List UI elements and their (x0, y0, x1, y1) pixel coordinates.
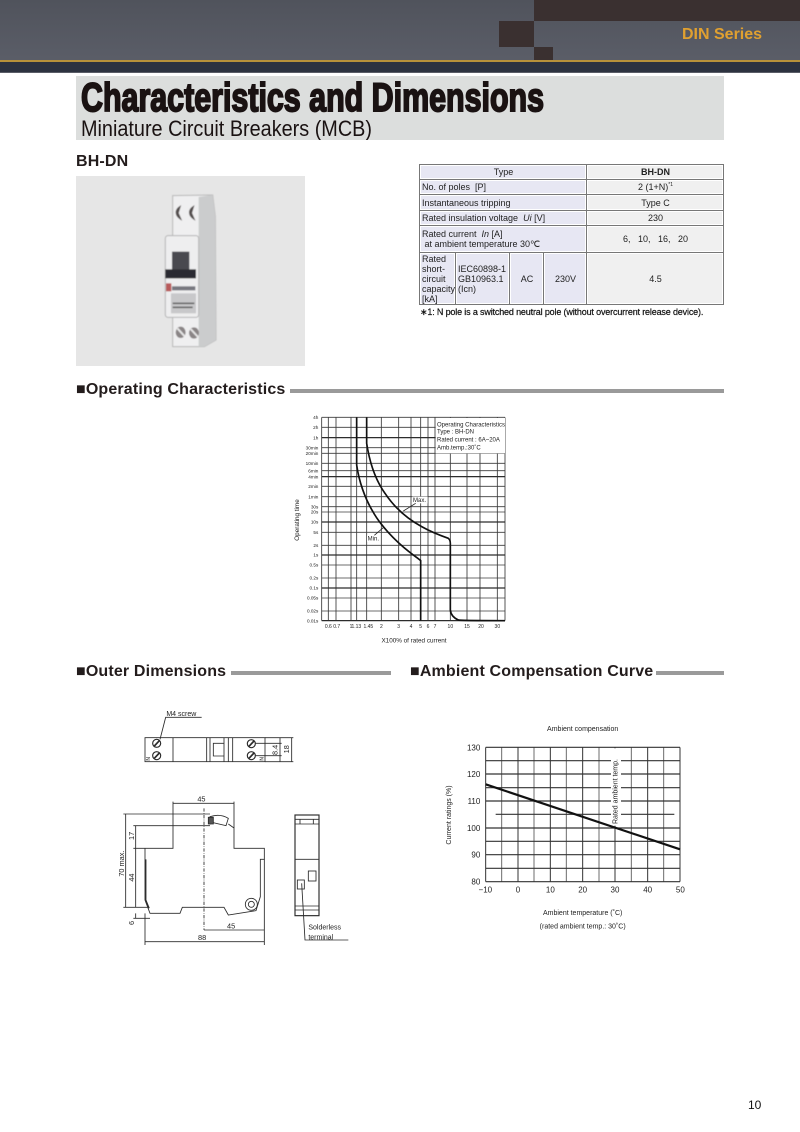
time axis labels: 0.2s (310, 576, 319, 581)
chart: ambient compensation (446, 726, 685, 930)
time axis labels: 20min (306, 451, 319, 456)
time axis labels: 0.5s (310, 563, 319, 568)
chart title: Ambient compensation (547, 726, 618, 733)
x axis title: X100% of rated current (381, 638, 447, 645)
rated ambient temp label (611, 748, 621, 826)
y axis values: 120 (467, 770, 481, 779)
x axis values: 0 (516, 885, 521, 894)
y axis values: 130 (467, 743, 481, 752)
time axis labels: 6min (308, 468, 319, 473)
gold rule (0, 60, 800, 62)
drawing: front view (123, 802, 264, 945)
current axis labels: 0.7 (333, 624, 340, 630)
time axis labels: 20s (311, 510, 319, 515)
x axis values: −10 (479, 885, 493, 894)
time axis labels: 10min (306, 461, 319, 466)
time axis labels: 1min (308, 494, 319, 499)
y axis title: Current ratings (%) (446, 785, 453, 845)
time axis labels: 0.05s (307, 596, 319, 601)
specification table: Rated short-circuit capacity [kA] (422, 254, 455, 304)
front view dimensions: 70 max. (117, 851, 126, 877)
specification table: BH-DN (641, 167, 670, 177)
specification table: Rated current In [A] (422, 229, 503, 239)
front view dimensions (117, 795, 235, 942)
specification table: Type (494, 167, 513, 177)
current axis labels: 7 (434, 624, 437, 630)
x axis title: Ambient temperature (˚C) (543, 909, 622, 917)
current axis labels: 6 (427, 624, 430, 630)
time axis labels: 0.1s (310, 586, 319, 591)
top view dimensions: 18 (282, 745, 291, 753)
front view dimensions: 45 (197, 795, 205, 804)
current axis labels: 15 (464, 624, 470, 630)
time axis labels: 1s (313, 553, 319, 558)
top view dimensions (146, 745, 291, 761)
time axis labels: 4h (313, 415, 319, 420)
chart legend: Type : BH-DN (437, 430, 474, 436)
heading: operating characteristics: ■Operating Characteristics (76, 381, 285, 398)
x axis title: (rated ambient temp.: 30˚C) (540, 922, 626, 930)
current axis labels: 0.6 (325, 624, 332, 630)
specification table: No. of poles [P] (422, 182, 486, 192)
specification table: 2 (1+N)*1 (638, 182, 673, 192)
current axis labels: 1.45 (363, 624, 373, 630)
compensation line (486, 784, 680, 849)
front view dimensions: 17 (127, 832, 136, 840)
front view dimensions: 44 (127, 874, 136, 882)
label: M4 screw: M4 screw (166, 711, 197, 718)
header dark block: small (534, 47, 553, 60)
front view dimensions: 6 (127, 921, 136, 925)
chart legend: Amb.temp.:30˚C (437, 445, 481, 452)
chart legend: Rated current : 6A~20A (437, 437, 500, 443)
time axis labels: 10s (311, 520, 319, 525)
dimension drawings (117, 711, 348, 945)
current axis labels: 3 (397, 624, 400, 630)
specification table: AC (521, 274, 533, 284)
top view dimensions: N (146, 757, 152, 761)
time axis labels: 2min (308, 484, 319, 489)
specification table: 230 (648, 213, 663, 223)
current axis labels: 1 (350, 624, 353, 630)
time axis labels: 1h (313, 435, 319, 440)
heading: outer dimensions: ■Outer Dimensions (76, 663, 226, 680)
specification table: 6, 10, 16, 20 (623, 234, 688, 244)
chart: operating characteristics (294, 415, 506, 645)
time axis labels: 2s (313, 543, 319, 548)
icon: circuit breaker (165, 195, 216, 347)
front view dimensions: 88 (198, 933, 206, 942)
time axis labels: 0.02s (307, 609, 319, 614)
chart legend (436, 418, 505, 453)
curve: min (357, 417, 421, 621)
x axis values: 20 (578, 885, 588, 894)
header dark block: top right (534, 0, 800, 21)
curve labels: Min. (368, 537, 379, 543)
specification table (419, 164, 724, 305)
curve labels (367, 497, 428, 543)
y axis values: 100 (467, 824, 481, 833)
specification table: Type C (641, 198, 670, 208)
label: solderless terminal (308, 924, 342, 941)
table footnote: ∗1: N pole is a switched neutral pole (without overcurrent release device). (420, 307, 703, 317)
label: solderless terminal: terminal (308, 934, 334, 941)
header dark block: middle (499, 21, 534, 47)
time axis labels (306, 415, 319, 623)
series label: DIN Series (682, 26, 762, 43)
specification table: 4.5 (649, 274, 662, 284)
time axis labels: 30s (311, 504, 319, 509)
heading: ambient compensation curve: ■Ambient Compensation Curve (410, 663, 653, 680)
model heading: BH-DN (76, 153, 128, 170)
specification table: Instantaneous tripping (422, 198, 511, 208)
chart grid (486, 747, 680, 882)
title panel (76, 76, 724, 140)
y axis values (467, 743, 481, 887)
x axis values: 10 (546, 885, 555, 894)
current axis labels: 2 (380, 624, 383, 630)
time axis labels: 4min (308, 474, 319, 479)
x axis values: 40 (643, 885, 653, 894)
curve: max (367, 417, 505, 621)
label: solderless terminal: Solderless (308, 924, 342, 931)
drawing: side view (295, 815, 348, 940)
time axis labels: 5s (313, 530, 319, 535)
x axis values: 50 (676, 885, 685, 894)
current axis labels: 4 (410, 624, 413, 630)
current axis labels (325, 624, 500, 630)
current axis labels: 30 (495, 624, 500, 630)
current axis labels: 1.13 (351, 624, 361, 630)
top view dimensions: 8.4 (270, 745, 279, 755)
current axis labels: 20 (478, 624, 484, 630)
chart grid (322, 417, 505, 621)
page number: 10 (748, 1098, 761, 1112)
specification table: 230V (555, 274, 576, 284)
y axis title: Operating time (294, 499, 301, 541)
x axis title (540, 909, 626, 930)
product photo panel (76, 176, 305, 366)
time axis labels: 30min (306, 445, 319, 450)
header banner (0, 0, 800, 73)
x axis values: 30 (611, 885, 620, 894)
specification table: at ambient temperature 30℃ (424, 239, 540, 249)
rated ambient temp label: Rated ambient temp. (613, 759, 620, 824)
title: Characteristics and Dimensions (81, 76, 544, 120)
dark band (0, 62, 800, 72)
y axis values: 80 (471, 878, 481, 887)
drawing: top view (145, 717, 293, 762)
y axis values: 90 (471, 851, 481, 860)
current axis labels: 5 (419, 624, 422, 630)
curve labels: Max. (413, 498, 426, 504)
time axis labels: 0.01s (307, 618, 319, 623)
chart legend: Operating Characteristics (437, 423, 505, 429)
specification table: Rated insulation voltage Ui [V] (422, 213, 545, 223)
time axis labels: 2h (313, 425, 319, 430)
y axis values: 110 (468, 797, 481, 806)
top view dimensions: N (259, 757, 265, 761)
specification table: IEC60898-1 GB10963.1 (Icn) (458, 264, 506, 294)
current axis labels: 10 (448, 624, 453, 630)
front view dimensions: 45 (227, 921, 235, 930)
x axis values (479, 885, 685, 894)
